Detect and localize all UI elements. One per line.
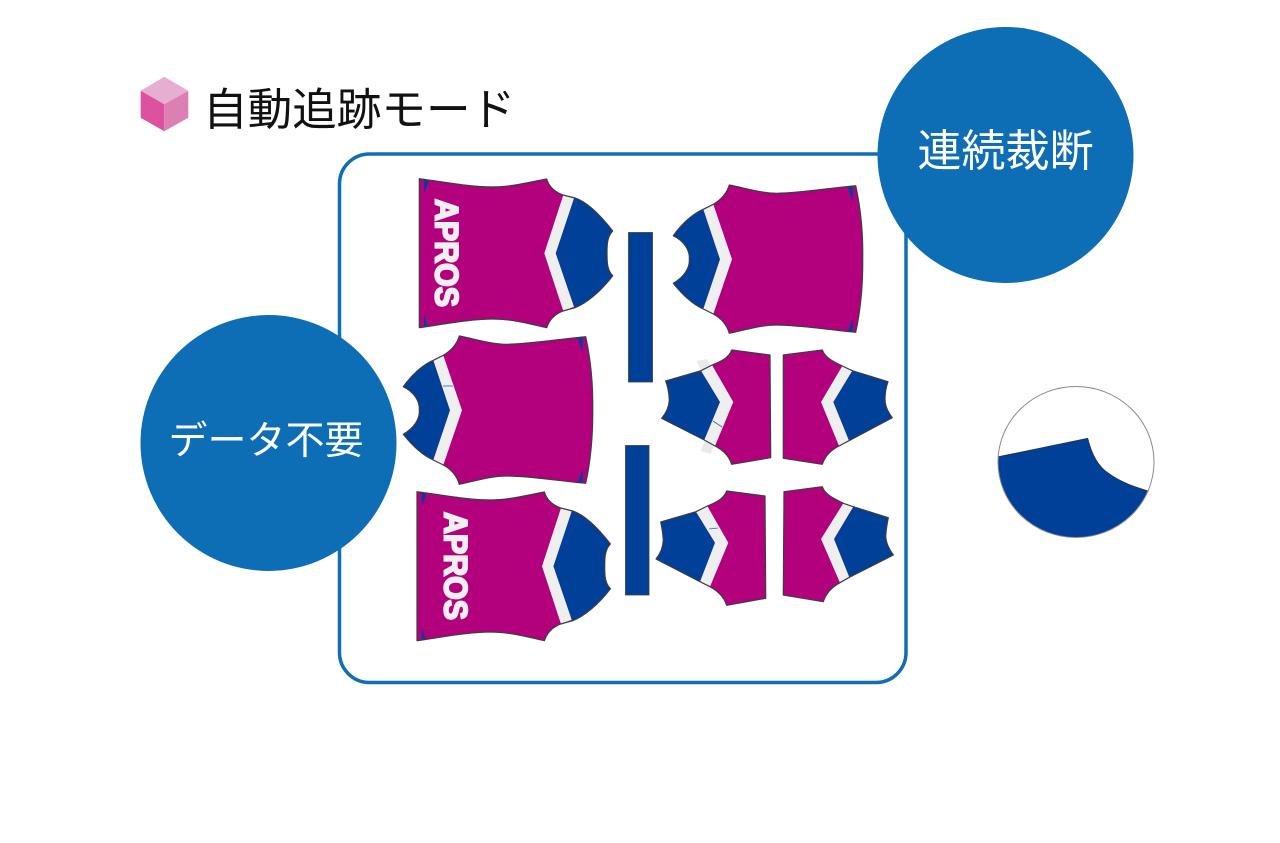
icon: pink cube [141, 77, 188, 131]
neck strip: lower [626, 446, 649, 595]
logo text: APROS top: APROS [428, 199, 464, 307]
pattern piece: back body, middle left [403, 336, 593, 484]
pattern piece: back body, top right [673, 185, 863, 333]
callout: no data needed [140, 315, 396, 571]
pattern piece: sleeve, bottom left [656, 491, 766, 605]
callout: no data needed: データ不要 [168, 420, 364, 463]
callout: continuous cutting: 連続裁断 [918, 127, 1094, 176]
title: 自動追跡モード [203, 86, 515, 135]
neck strip: upper [628, 232, 652, 382]
pattern piece: sleeve, middle left [662, 350, 771, 464]
pattern piece: front body with APROS, bottom [417, 492, 610, 641]
logo text: APROS bottom: APROS [438, 512, 474, 620]
callout: continuous cutting [878, 27, 1134, 283]
detail magnifier: cut edge close-up [990, 386, 1155, 545]
pattern piece: front body with APROS, top [419, 179, 613, 328]
cutting area panel [340, 154, 906, 682]
pattern piece: sleeve, middle right [783, 350, 892, 464]
pattern piece: sleeve, bottom right [783, 487, 893, 602]
